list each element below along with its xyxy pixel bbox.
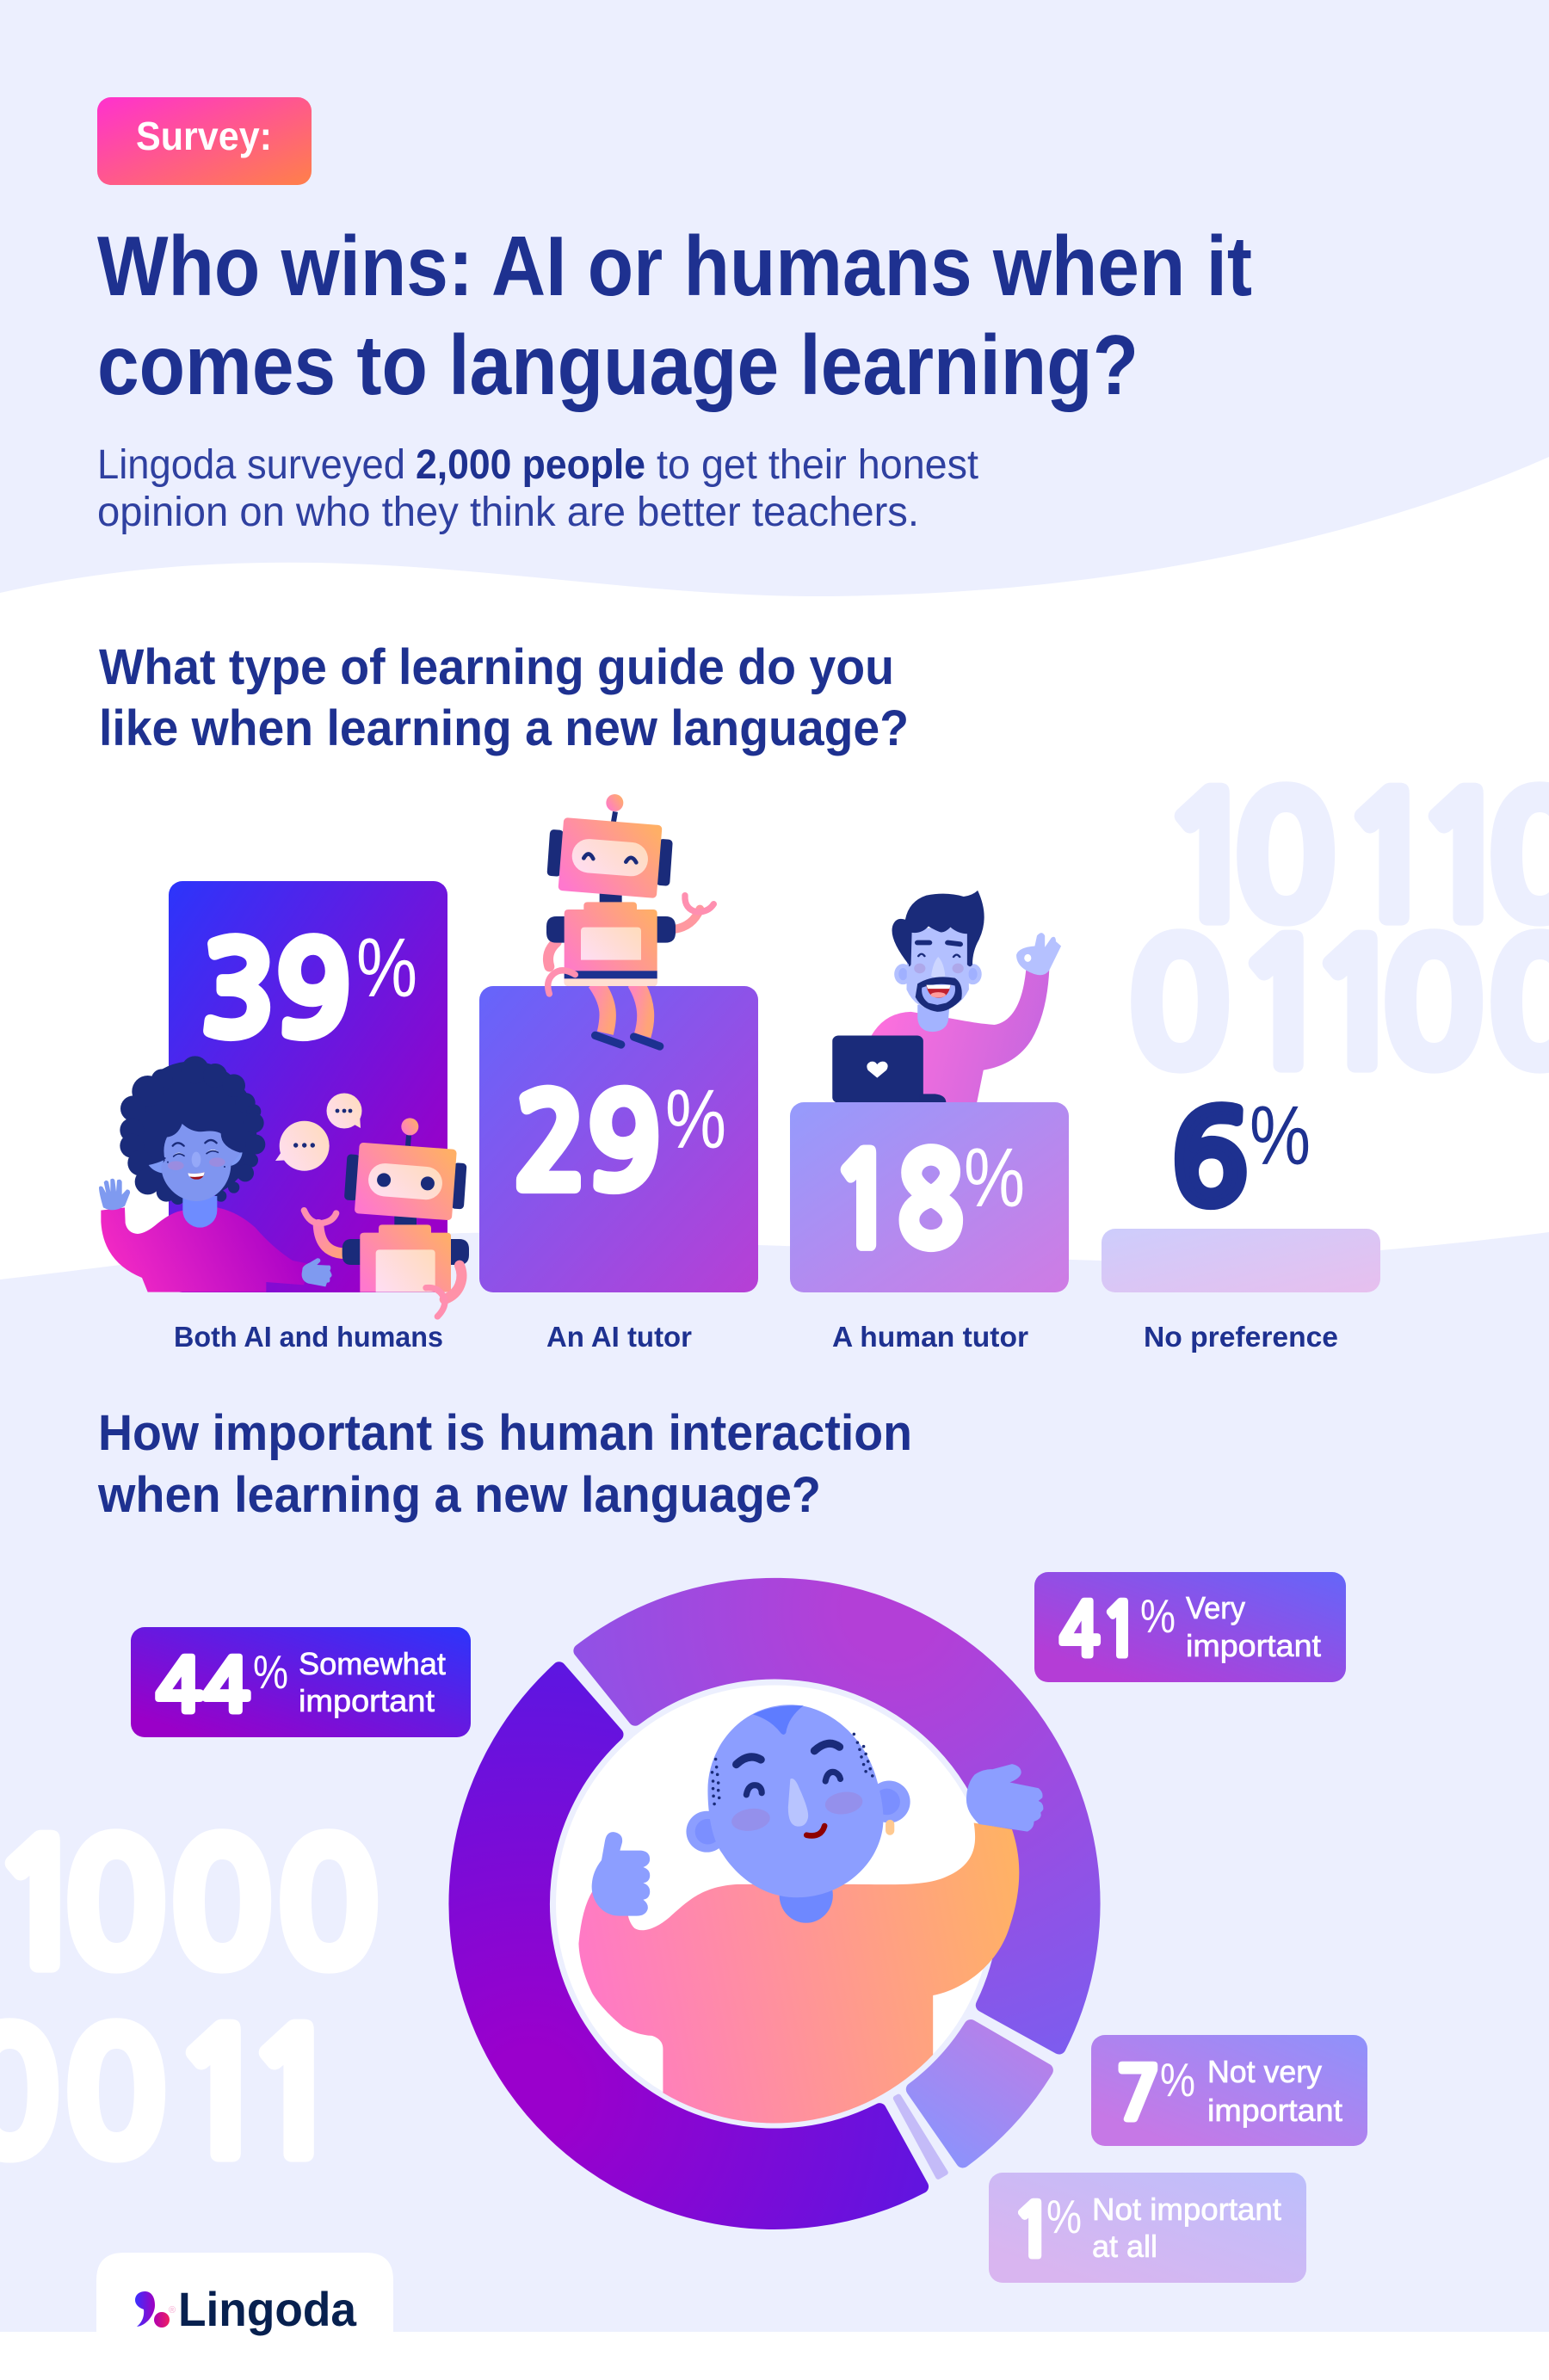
face [906,928,969,1010]
OK hand [1016,933,1061,975]
robot visor [367,1162,443,1201]
callout: 44% somewhat important: Somewhat [299,1646,446,1681]
segment: 7% not very important [913,2026,1046,2161]
body [578,1822,1019,2123]
robot head [355,1143,457,1220]
bar labels [174,1321,1338,1353]
neck [917,1005,949,1032]
callout: 44% somewhat important [131,1627,471,1737]
callout: 41% very important [1034,1572,1346,1682]
stubble dots [711,1733,874,1805]
value: 6%: 6 [1171,1098,1249,1224]
ears [894,964,982,984]
neck [780,1868,833,1923]
mouth [806,1826,824,1835]
bar: human tutor 18%: % [964,1131,1025,1224]
title: comes to language learning? [97,318,1139,412]
ears, neck, shoulders [546,829,676,943]
torso [565,902,657,986]
open hand [966,1764,1043,1832]
illustration: robot sitting on bar [546,794,713,1046]
cheeks [730,1790,864,1834]
heading: learning guide question: like when learning a new language? [99,700,909,756]
hand claw [548,971,575,994]
chest panel [581,928,641,960]
illustration: robot beside woman [304,1118,469,1316]
heading: learning guide question: What type of learning guide do you [99,639,894,695]
callout: 44% somewhat important: % [253,1645,288,1699]
sweater [101,1207,307,1292]
callout: 1% not important at all [989,2173,1306,2283]
callout: 1% not important at all: at all [1092,2229,1157,2264]
segment: 41% very important [580,1585,1094,2048]
bar labels: No preference [1144,1321,1338,1353]
bar labels: Both AI and humans [174,1321,443,1353]
cheeks and nose [914,957,964,978]
sweater [872,971,1049,1103]
visor with smiling eyes [571,838,649,878]
donut inner white circle [556,1685,993,2122]
nose [788,1779,808,1827]
face [161,1124,241,1201]
earring [886,1820,894,1835]
donut chart [455,1585,1094,2223]
callout: 44% somewhat important: 44 [156,1650,250,1723]
segment: 1% not important at all [896,2097,946,2177]
robot left arm [304,1211,346,1254]
shoes [596,1035,660,1046]
bar: human tutor 18% [790,1102,1069,1292]
legs [596,983,645,1035]
robot ears and neck [343,1154,469,1265]
background binary digits top right [1127,774,1549,1092]
ears [149,1152,243,1173]
callout: 7% not very important: 7 [1116,2058,1161,2130]
robot right arm [426,1266,461,1316]
value: 6%: % [1250,1088,1311,1182]
bar: AI tutor 29% [479,986,758,1292]
callout: 41% very important: important [1186,1628,1321,1663]
bar labels: A human tutor [832,1321,1028,1353]
callout: 7% not very important: important [1207,2093,1342,2128]
title [97,219,1252,412]
badge: Survey [97,97,312,185]
beard and mouth [916,977,962,1012]
callout: 7% not very important [1091,2035,1367,2146]
bar: both AI and humans 39%: % [356,921,417,1014]
intro text: Lingoda surveyed [97,442,405,488]
callout: 7% not very important: % [1160,2053,1195,2106]
bar: both AI and humans 39% [169,881,447,1292]
neck [182,1196,217,1228]
head [558,817,663,898]
bar: no preference [1102,1229,1380,1292]
callout: 41% very important: % [1140,1589,1176,1643]
bar labels: An AI tutor [546,1321,692,1353]
logo panel [96,2253,393,2332]
speech bubble small [327,1093,361,1129]
belt [565,971,657,986]
callout: 1% not important at all: % [1046,2190,1082,2243]
eyebrows and eyes [737,1743,841,1795]
callout: 41% very important: 41 [1059,1594,1141,1667]
background binary digits bottom left [0,1822,380,2181]
heading: learning guide question [99,639,909,756]
heading: human interaction question: when learning a new language? [97,1467,821,1523]
callout: 1% not important at all: Not important [1092,2192,1281,2227]
head [707,1705,883,1897]
illustration: bald man giving thumbs up [578,1705,1043,2123]
facial features [164,1140,225,1180]
intro text: to get their honest [657,442,978,488]
speech bubble large [275,1121,330,1171]
segment: 44% somewhat important [455,1668,922,2223]
robot antenna [401,1118,418,1146]
illustration: woman with afro waving [99,1056,332,1292]
raised hand [99,1179,130,1210]
logo: Lingoda: Lingoda [178,2282,357,2336]
title: Who wins: AI or humans when it [97,219,1252,313]
intro text [97,442,978,535]
pointing hand [302,1258,332,1286]
callout: 44% somewhat important: important [299,1683,435,1718]
heading: human interaction question [97,1405,912,1523]
laptop [832,1036,946,1103]
intro text: 2,000 people [416,442,645,488]
hair wedge [753,1705,804,1735]
white wave band behind first chart [0,457,1549,1279]
robot chest panel [376,1249,435,1292]
brows and eyes [917,943,960,957]
callout: 1% not important at all: 1 [1011,2195,1056,2267]
callout: 7% not very important: Not very [1207,2054,1322,2089]
robot torso [360,1224,451,1292]
ears [686,1780,910,1853]
heading: human interaction question: How important is human interaction [98,1405,912,1461]
value: 6% [1171,1088,1311,1224]
thumbs up hand [592,1832,650,1916]
callout: 41% very important: Very [1186,1590,1245,1625]
bar: AI tutor 29%: 29 [514,1081,661,1208]
bar: both AI and humans 39%: 39 [201,929,351,1055]
background binary digits bottom left: 1000 [0,1822,380,1992]
illustration: man with laptop [832,891,1061,1103]
bar: human tutor 18%: 18 [830,1140,964,1266]
hair [892,891,984,966]
badge: Survey: Survey: [136,114,272,158]
arms [548,896,713,966]
hair [120,1056,265,1205]
intro text: opinion on who they think are better teachers. [97,490,919,535]
antenna [606,794,623,822]
logo: Lingoda: ® [169,2305,176,2315]
bar: AI tutor 29%: % [665,1072,726,1166]
